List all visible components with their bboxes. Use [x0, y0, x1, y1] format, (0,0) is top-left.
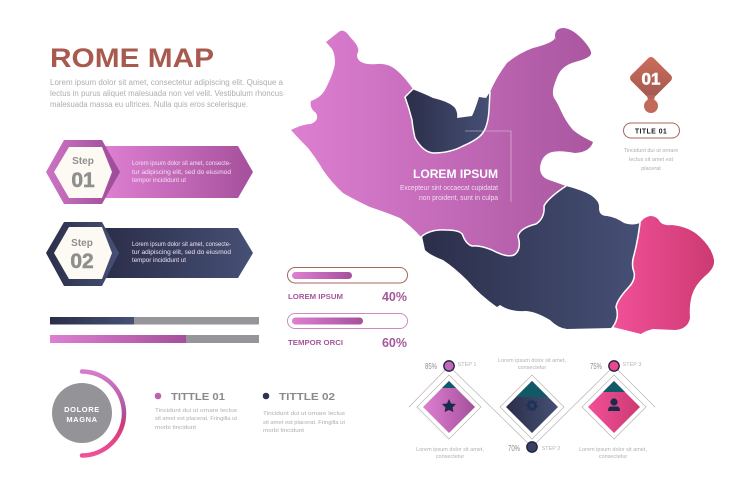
callout: lorem ipsum: non proident, sunt in culpa — [419, 195, 498, 202]
intro text block: malesuada massa eu ultrices. Nulla quis eros scelerisque. — [50, 100, 248, 109]
node: step 2 70%: STEP 2 — [542, 446, 560, 452]
circle badge: dolore magna: MAGNA — [66, 415, 98, 424]
callout: lorem ipsum: LOREM IPSUM — [413, 169, 498, 181]
region borders — [405, 89, 640, 328]
caption: bottom left — [416, 447, 484, 460]
pill: title 01 — [624, 123, 680, 138]
panel: step 01 — [46, 140, 253, 204]
progress: tempor orci 60%: TEMPOR ORCI — [288, 340, 343, 347]
legend: tittle 02 — [263, 391, 345, 434]
callout: lorem ipsum — [400, 169, 498, 202]
panel: step 02 — [46, 222, 253, 286]
progress: lorem ipsum 40% — [288, 268, 408, 304]
title: ROME MAP — [50, 43, 214, 73]
caption: top centre: consectetur — [518, 365, 546, 371]
progress: lorem ipsum 40%: LOREM IPSUM — [288, 294, 343, 301]
diamond: step 1 star — [417, 375, 481, 439]
panel: step 02: tur adipiscing elit, sed do eiusmod — [132, 250, 231, 256]
node: step 1 85%: 85% — [425, 362, 437, 371]
node: step 1 85% — [425, 361, 476, 371]
map region: dark enclave — [405, 89, 490, 153]
node: step 2 70% — [508, 442, 560, 453]
legend: tittle 02: Tincidunt dui ut ornare lectus — [263, 411, 345, 417]
diamond: step 2 gear — [500, 375, 564, 439]
intro text block — [50, 78, 284, 109]
callout: lorem ipsum: Excepteur sint occaecat cupidatat — [400, 185, 498, 192]
panel: step 02: Lorem ipsum dolor sit amet, consecte- — [132, 242, 231, 248]
caption: bottom left: Lorem ipsum dolor sit amet, — [416, 447, 484, 453]
legend: tittle 01: sit amet est placerat. Fringilla ut — [155, 416, 237, 422]
caption: bottom right — [579, 447, 647, 460]
panel: step 01: tempor incididunt ut — [132, 178, 186, 184]
caption: bottom right: consectetur — [599, 454, 627, 460]
node: step 3 75%: 75% — [590, 362, 602, 371]
caption: bottom left: consectetur — [436, 454, 464, 460]
panel: step 01: Lorem ipsum dolor sit amet, consecte- — [132, 161, 231, 167]
legend: tittle 01: Tincidunt dui ut ornare lectus — [155, 408, 237, 414]
map of Rome region — [291, 28, 714, 334]
panel: step 01: Step — [72, 156, 94, 167]
node: step 1 85%: STEP 1 — [458, 362, 476, 368]
marker: 01: 01 — [642, 70, 660, 88]
zigzag line — [409, 366, 655, 447]
panel: step 01: 01 — [71, 169, 95, 192]
caption: top centre: Lorem ipsum dolor sit amet, — [498, 358, 566, 364]
circle badge: dolore magna: DOLORE — [64, 405, 100, 414]
node: step 2 70%: 70% — [508, 444, 520, 453]
progress: lorem ipsum 40%: 40% — [382, 290, 407, 304]
diamond: step 3 person — [582, 375, 646, 439]
intro text block: Lorem ipsum dolor sit amet, consectetur adipiscing elit. Quisque a — [50, 78, 284, 87]
panel: step 02: 02 — [70, 250, 94, 273]
text: title 01 description: placerat — [641, 166, 661, 172]
caption: top centre — [498, 358, 566, 371]
bar: purple progress — [50, 335, 259, 343]
panel: step 02: tempor incididunt ut — [132, 258, 186, 264]
legend: tittle 02: TITTLE 02 — [279, 391, 335, 403]
progress: tempor orci 60%: 60% — [382, 336, 407, 350]
text: title 01 description: lectus sit amet est — [629, 157, 673, 163]
pill: title 01: TITLE 01 — [635, 128, 667, 136]
map region: dark south — [422, 186, 640, 329]
legend: tittle 01: TITTLE 01 — [171, 391, 225, 403]
node: step 3 75%: STEP 3 — [623, 362, 641, 368]
panel: step 02: Step — [71, 238, 93, 249]
callout leader line — [465, 131, 511, 202]
panel: step 01: tur adipiscing elit, sed do eiusmod — [132, 170, 231, 176]
legend: tittle 02: morbi tincidunt — [263, 428, 305, 434]
progress: tempor orci 60% — [288, 314, 408, 350]
map region: purple — [291, 28, 593, 256]
intro text block: lectus in purus aliquet malesuada non vel velit. Vestibulum rhoncus — [50, 89, 283, 98]
marker: 01 — [628, 55, 674, 113]
node: step 3 75% — [590, 361, 641, 371]
legend: tittle 02: sit amet est placerat. Fringilla ut — [263, 420, 345, 426]
diagram: steps diamonds — [409, 358, 655, 460]
text: title 01 description: Tincidunt dui ut ornare — [624, 148, 678, 154]
caption: bottom right: Lorem ipsum dolor sit amet, — [579, 447, 647, 453]
legend: tittle 01 — [155, 391, 237, 431]
bar: dark progress — [50, 317, 259, 324]
map region: pink east — [613, 216, 714, 334]
text: title 01 description — [624, 148, 678, 172]
circle badge: dolore magna — [52, 372, 124, 456]
legend: tittle 01: morbi tincidunt — [155, 425, 197, 431]
